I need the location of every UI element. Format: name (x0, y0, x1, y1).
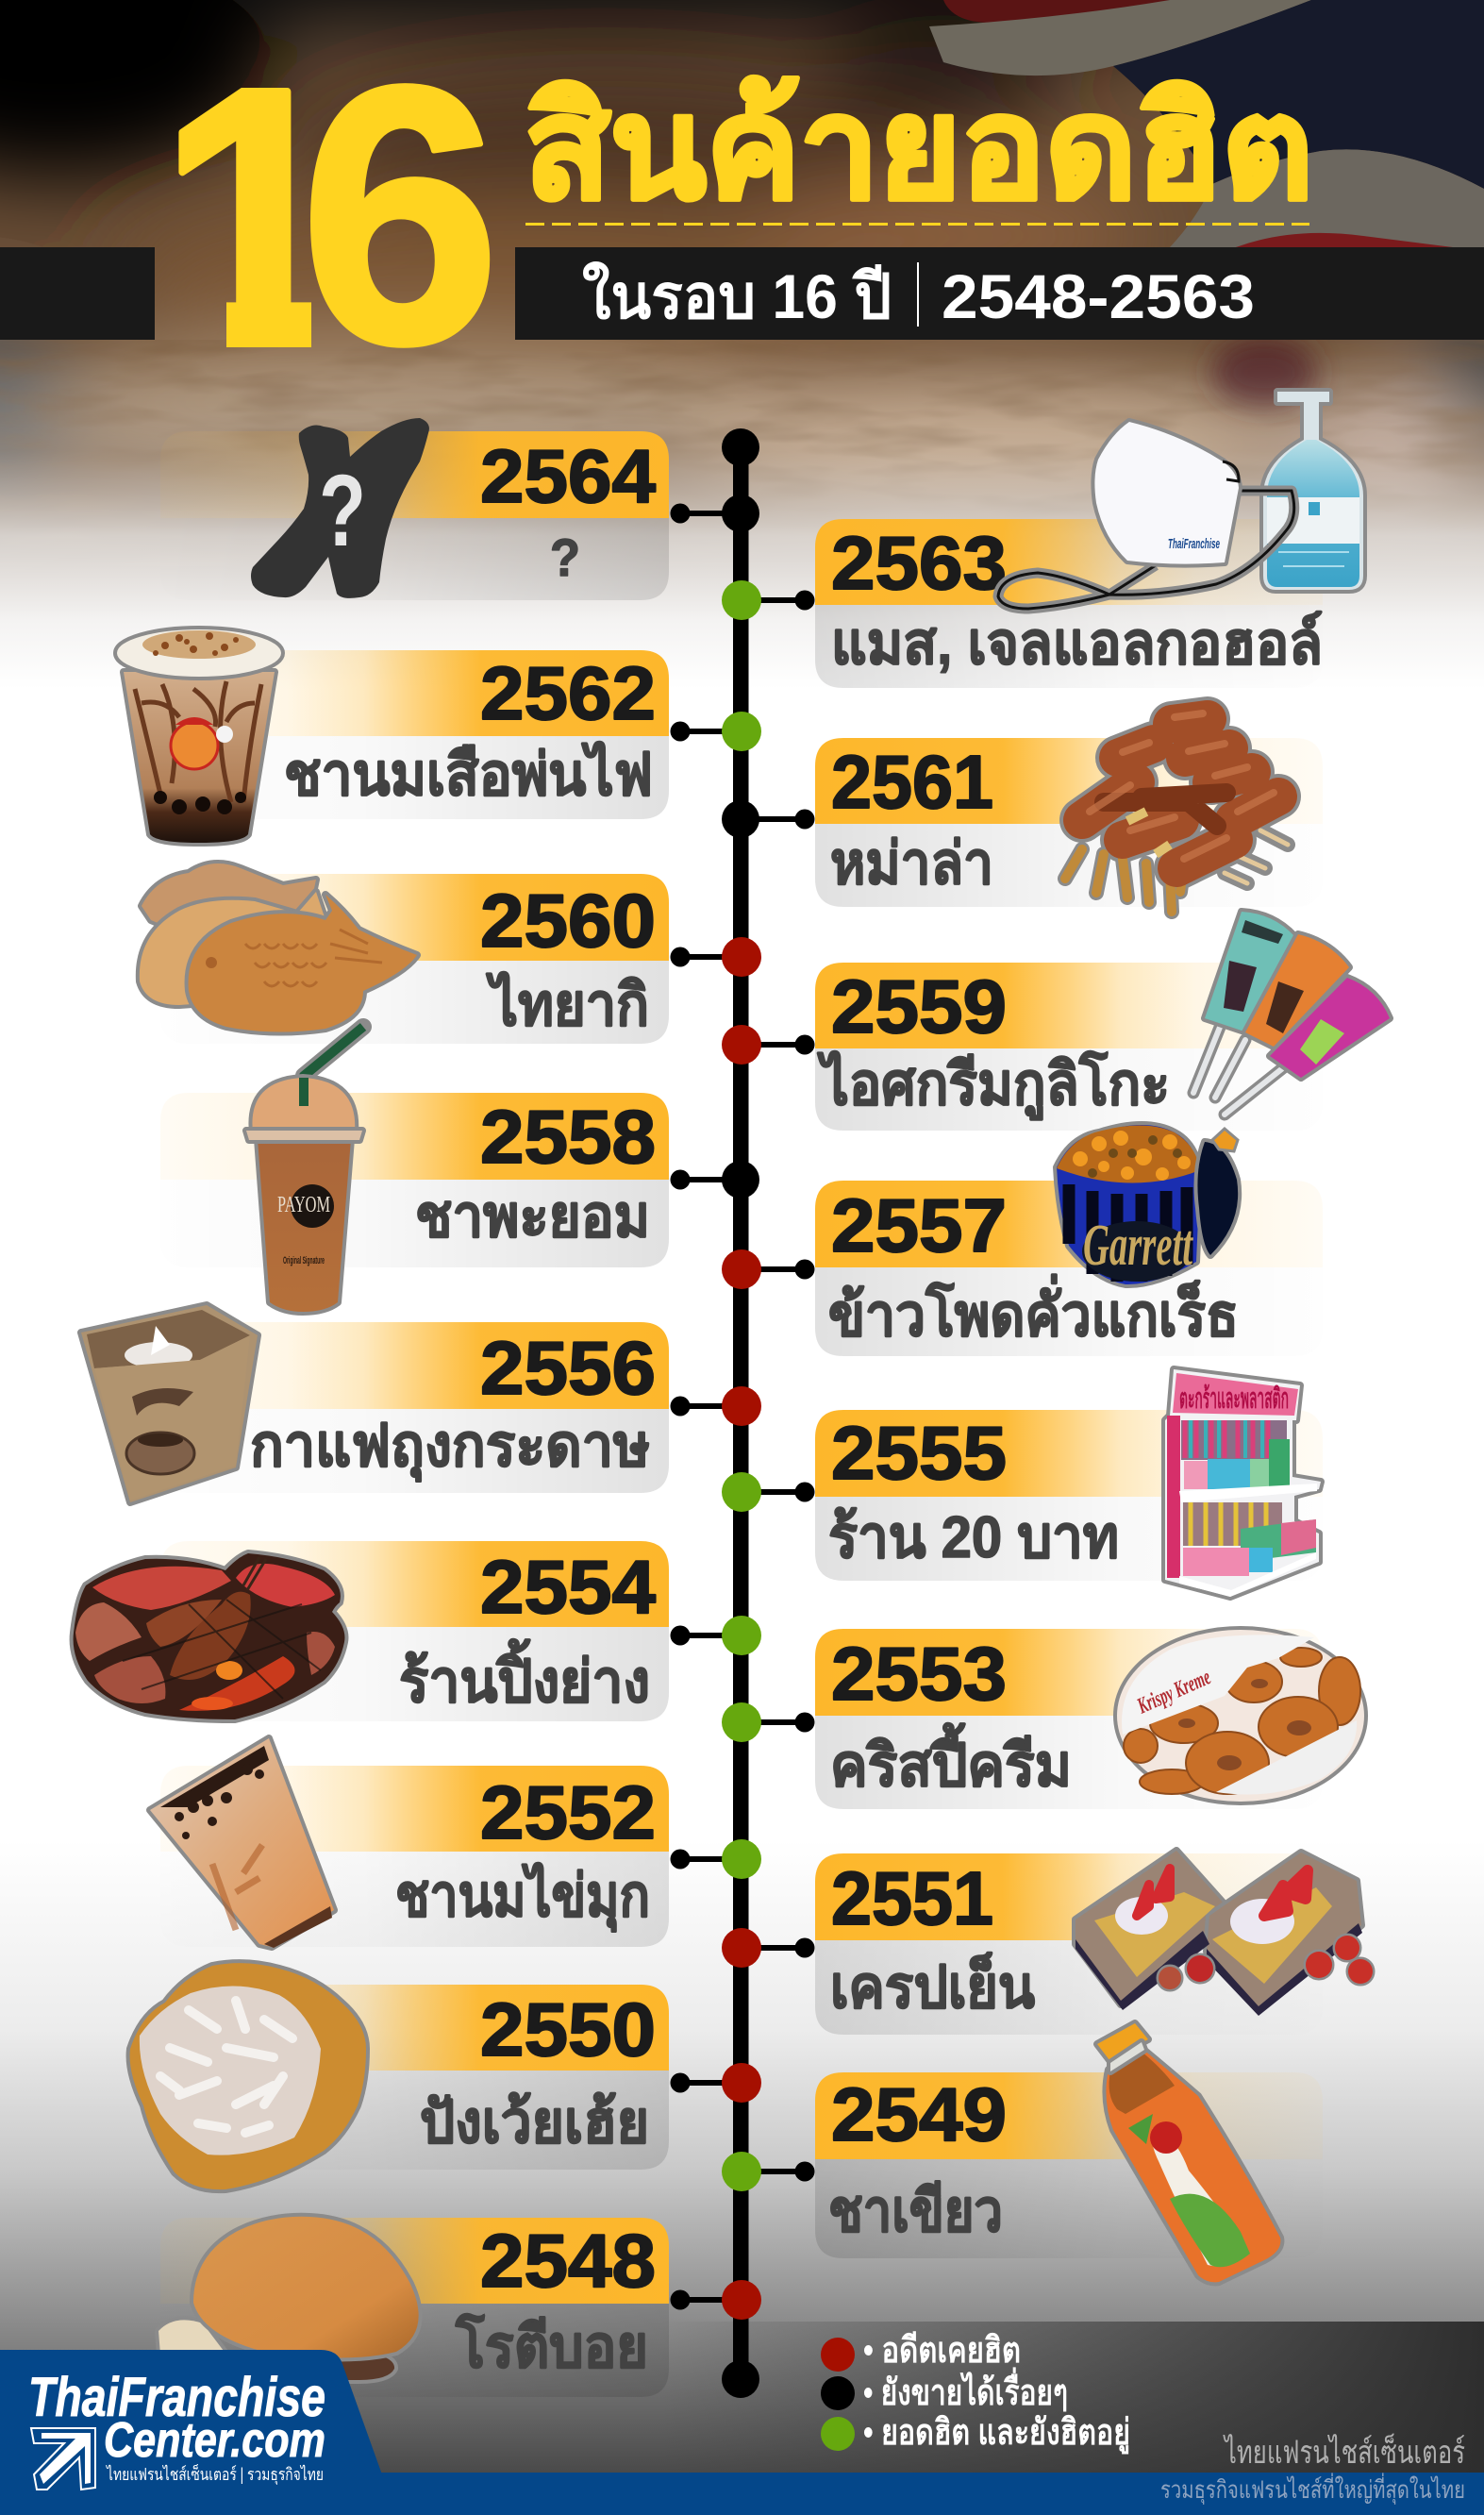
panel: 2556: กาแฟถุงกระดาษ (250, 1414, 650, 1482)
legend: • ยังขายได้เรื่อยๆ (863, 2367, 1068, 2413)
title dashed rule (525, 223, 1309, 226)
icon: popcorn tin: Garrett (1083, 1214, 1193, 1278)
panel: 2564: ? (550, 528, 580, 587)
legend and footer dark band (0, 2322, 1484, 2477)
panel: 2564: 2564 (480, 434, 657, 518)
icon: glico ice cream cones (1193, 912, 1390, 1115)
panel: 2560: ไทยากิ (485, 971, 649, 1038)
panel: 2561 (815, 713, 1323, 912)
title: สินค้ายอดฮิต (525, 69, 1313, 227)
icon: coconut bun (130, 1963, 366, 2189)
panel: 2561: 2561 (831, 740, 993, 824)
icon: bubble milk tea (150, 1738, 334, 1948)
panel: 2549: ชาเขียว (828, 2179, 1003, 2244)
panel: 2556: 2556 (480, 1326, 656, 1410)
panel: 2558: 2558 (480, 1095, 656, 1179)
panel: 2559: ไอศกรีมกูลิโกะ (816, 1049, 1170, 1120)
panel: 2563: แมส, เจลแอลกอฮอล์ (831, 611, 1323, 677)
icon: krispy kreme doughnuts: Krispy Kreme (1133, 1665, 1215, 1719)
panel: 2551: เครปเย็น (830, 1952, 1035, 2020)
panel: 2555: ร้าน 20 บาท (828, 1505, 1119, 1570)
panel: 2563 (815, 392, 1363, 688)
panel: 2562: 2562 (480, 651, 656, 735)
header bar: right (515, 247, 1484, 340)
icon: 20 baht store rack (1165, 1369, 1321, 1597)
panel: 2554 (74, 1541, 669, 1721)
panel: 2555 (815, 1369, 1323, 1597)
legend (821, 2331, 1130, 2455)
panel: 2557 (815, 1125, 1323, 1356)
icon: Thai tea cup: Original Signature (283, 1255, 325, 1266)
panel: 2553: 2553 (831, 1632, 1007, 1716)
logo block (0, 2350, 383, 2490)
icon: taiyaki fish (140, 863, 417, 1032)
panel: 2558 (160, 1027, 669, 1312)
panel: 2557: ข้าวโพดคั่วแกเร็ธ (828, 1274, 1239, 1349)
panel: 2549: 2549 (831, 2072, 1007, 2156)
icon: Thai tea cup: PAYOM (277, 1193, 330, 1217)
legend: • อดีตเคยฮิต (863, 2331, 1021, 2371)
panel: 2560: 2560 (480, 879, 656, 963)
header bar: left (0, 247, 155, 340)
big number 16: 6 (300, 11, 500, 420)
panel: 2548: 2548 (480, 2219, 656, 2303)
icon: 20 baht store rack: ตะกร้าและพลาสติก (1179, 1383, 1289, 1415)
logo block: ไทยแฟรนไชส์เซ็นเตอร์ | รวมธุรกิจไทย (105, 2463, 324, 2485)
big number 16 (178, 83, 491, 348)
panel: 2552: ชานมไข่มุก (395, 1862, 650, 1932)
icon: grilled meat (74, 1553, 344, 1719)
icon: cloth mask: ThaiFranchise (1168, 536, 1220, 552)
panel: 2559: 2559 (831, 964, 1007, 1048)
panel: 2554: 2554 (480, 1545, 657, 1629)
icon: fire tiger milk tea cup (117, 629, 281, 843)
panel: 2556 (81, 1305, 669, 1502)
panel: 2563: 2563 (831, 521, 1007, 605)
logo block: ThaiFranchise (28, 2367, 325, 2428)
panel: 2552: 2552 (480, 1770, 656, 1854)
panel: 2551 (815, 1851, 1373, 2035)
icon: Thai tea cup (246, 1027, 363, 1312)
panel: 2558: ชาพะยอม (415, 1184, 650, 1249)
panel: 2557: 2557 (831, 1183, 1007, 1267)
panel: 2561: หม่าล่า (830, 831, 993, 897)
icon: popcorn tin (1057, 1125, 1238, 1284)
icon: green tea bottle (1097, 2023, 1280, 2282)
panel: 2548 (158, 2217, 669, 2397)
panel: 2552 (150, 1738, 669, 1948)
icon: mystery silhouette (251, 418, 429, 598)
panel: 2554: ร้านปิ้งย่าง (399, 1638, 650, 1715)
footer blue bar (0, 2473, 1484, 2515)
panel: 2562 (117, 629, 669, 843)
panel: 2551: 2551 (831, 1856, 993, 1940)
panel: 2550: 2550 (480, 1987, 656, 2071)
panel: 2549 (815, 2023, 1323, 2282)
icon: cold crepes with strawberries (1075, 1851, 1373, 2016)
icon: krispy kreme doughnuts (1117, 1630, 1364, 1802)
panel: 2562: ชานมเสือพ่นไฟ (284, 741, 653, 808)
panel: 2553 (815, 1629, 1364, 1809)
timeline (670, 428, 815, 2398)
logo block: Center.com (104, 2413, 325, 2468)
background photo: food and flag (0, 0, 1484, 717)
icon: logo arrow (31, 2428, 95, 2490)
panel: 2550 (130, 1963, 669, 2189)
icon: Rotiboy bun (158, 2217, 419, 2380)
icon: mala skewers (1065, 713, 1288, 912)
subtitle (582, 260, 1255, 331)
icon: mystery silhouette: ? (319, 453, 366, 567)
legend: • ยอดฮิต และยังฮิตอยู่ (863, 2413, 1130, 2455)
subtitle: 2548-2563 (942, 261, 1255, 331)
panel: 2548: โรตีบอย (455, 2312, 648, 2380)
panel: 2564 (160, 418, 669, 600)
panel: 2560 (140, 863, 669, 1044)
subtitle: ในรอบ 16 ปี (582, 260, 892, 331)
panel: 2555: 2555 (831, 1411, 1007, 1495)
icon: paper bag coffee (81, 1305, 258, 1502)
icon: cloth mask (998, 422, 1294, 609)
icon: hand gel bottle (1263, 392, 1363, 590)
panel: 2559 (815, 912, 1390, 1131)
panel: 2550: ปังเว้ยเฮ้ย (420, 2090, 649, 2155)
big number 16: 1 (158, 13, 352, 422)
panel: 2553: คริสปี้ครีม (830, 1722, 1072, 1799)
